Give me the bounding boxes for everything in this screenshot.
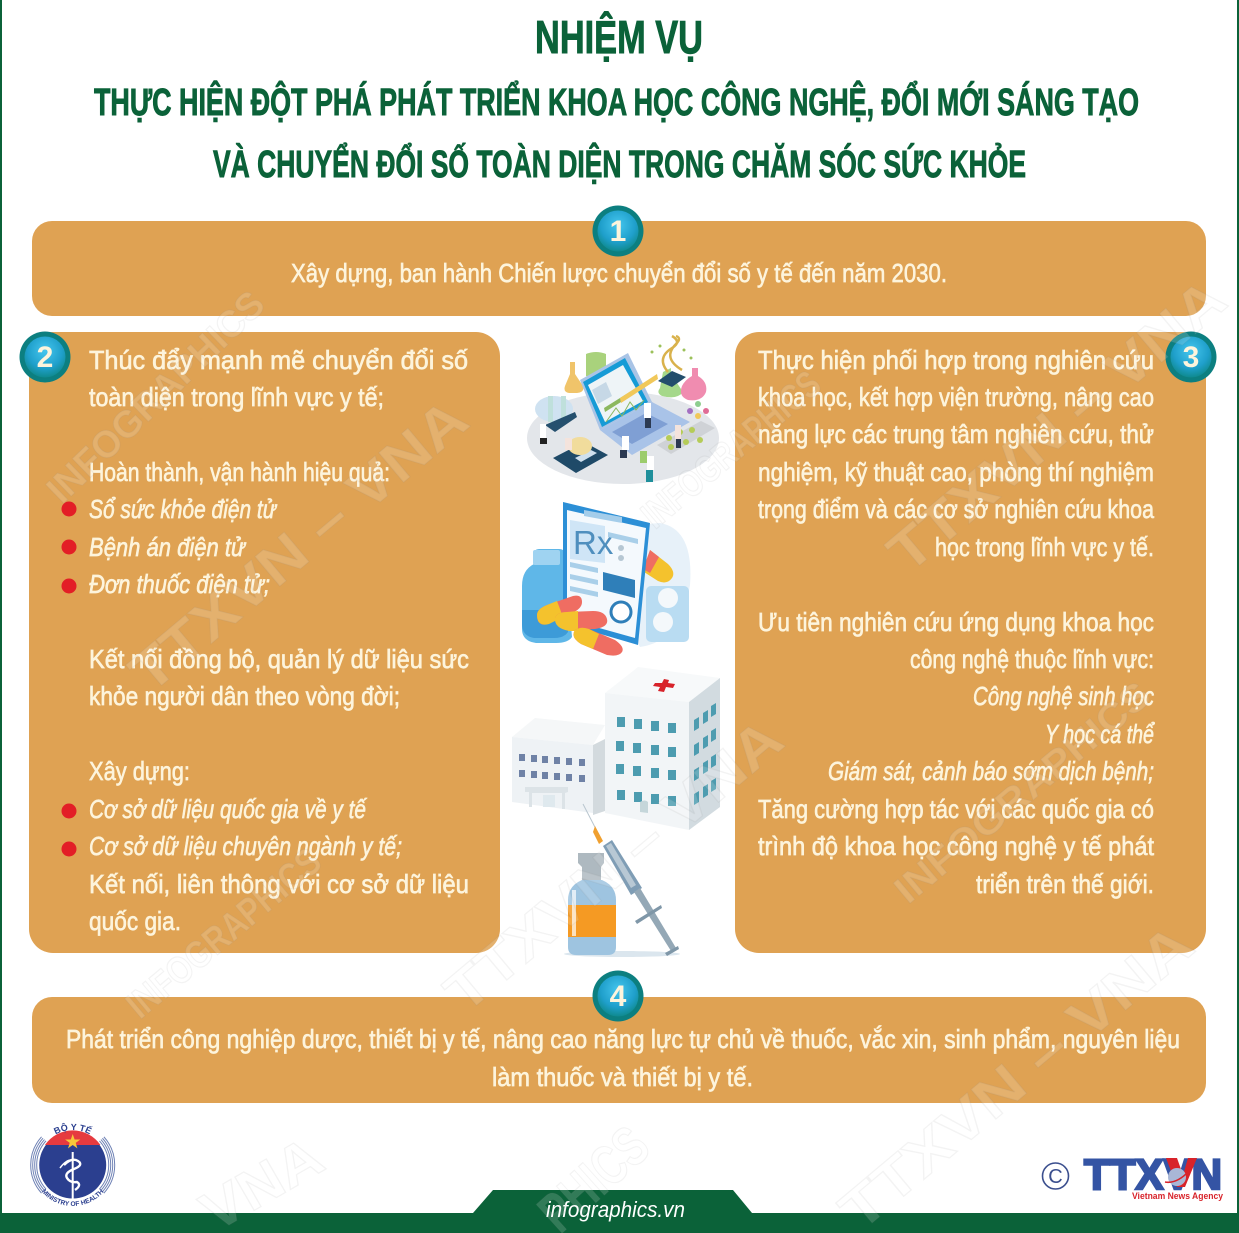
text: TTXVN – VNA [117,386,479,704]
text: TTXVN – VNA [432,706,794,1024]
panel: task 3: trình độ khoa học công nghệ y tế phát [758,831,1155,861]
badge 1: 1 [610,215,626,248]
panel: task 3: khoa học, kết hợp viện trường, nâng cao [758,382,1154,412]
text: INFOGRAPHICS [634,363,829,537]
logo: TTXVN: TTXVN [1084,1151,1222,1199]
badge 2 [20,332,70,382]
panel: task 3: học trong lĩnh vực y tế. [935,532,1154,562]
badge 3: 3 [1183,341,1199,374]
panel: task 2: Thúc đẩy mạnh mẽ chuyển đổi số [89,345,468,375]
panel: task 3: trọng điểm và các cơ sở nghiên cứu khoa [758,494,1154,524]
text: INFOGRAPHICS [887,674,1159,912]
panel: task 2: quốc gia. [89,906,181,936]
icon: prescription and pills: Rx [573,524,614,561]
badge 3 [1166,332,1216,382]
logo: Ministry of Health: BỘ Y TẾ [54,1122,93,1134]
panel: task 1 [32,221,1206,316]
panel: task 2: Đơn thuốc điện tử; [89,569,270,599]
panel: task 3: năng lực các trung tâm nghiên cứu, thử [758,419,1154,449]
panel: task 2: Cơ sở dữ liệu chuyên ngành y tế; [89,831,402,861]
panel: task 2: Cơ sở dữ liệu quốc gia về y tế [89,794,367,824]
panel: task 2: Sổ sức khỏe điện tử [89,494,277,524]
icon: laboratory and laptop [527,336,719,484]
footer band: infographics.vn [546,1197,685,1222]
panel: task 2: toàn diện trong lĩnh vực y tế; [89,382,384,412]
icon: hospital buildings [512,667,720,830]
logo: TTXVN: C [1048,1166,1063,1188]
panel: task 3: Thực hiện phối hợp trong nghiên cứu [758,345,1154,375]
panel: task 4 [32,997,1206,1103]
panel: task 1: Xây dựng, ban hành Chiến lược chuyển đổi số y tế đến năm 2030. [291,258,947,288]
badge 2: 2 [37,341,53,374]
panel: task 3: Y học cá thể [1045,719,1155,749]
panel: task 4: làm thuốc và thiết bị y tế. [492,1062,753,1092]
panel: task 3: công nghệ thuộc lĩnh vực: [910,644,1154,674]
panel: task 3: Giám sát, cảnh báo sớm dịch bệnh; [828,756,1154,786]
title: NHIỆM VỤ [535,11,703,63]
panel: task 3: triển trên thế giới. [976,869,1154,899]
panel: task 2: Bệnh án điện tử [89,532,246,562]
panel: task 2 [29,332,500,953]
panel: task 3: nghiệm, kỹ thuật cao, phòng thí nghiệm [758,457,1154,487]
panel: task 3: Công nghệ sinh học [973,681,1154,711]
panel: task 2: Kết nối, liên thông với cơ sở dữ liệu [89,869,469,899]
logo: TTXVN: Vietnam News Agency [1132,1191,1224,1202]
badge 4: 4 [610,980,627,1013]
badge 4 [592,970,644,1022]
panel: task 2: Kết nối đồng bộ, quản lý dữ liệu sức [89,644,469,674]
logo: Ministry of Health: MINISTRY OF HEALTH [42,1189,104,1206]
panel: task 2: Hoàn thành, vận hành hiệu quả: [89,457,390,487]
panel: task 3: Ưu tiên nghiên cứu ứng dụng khoa học [758,607,1154,637]
badge 1 [592,206,644,256]
panel: task 2: Xây dựng: [89,756,190,786]
panel: task 3: Tăng cường hợp tác với các quốc gia có [758,794,1154,824]
title [94,11,1139,186]
panel: task 3 [735,332,1206,953]
text: INFOGRAPHICS [119,840,330,1027]
text: INFOGRAPHICS [39,283,273,511]
logo: Ministry of Health [30,1122,116,1206]
text: TTXVN – VNA [875,266,1237,584]
icon: prescription and pills [522,502,690,656]
panel: task 2: khỏe người dân theo vòng đời; [89,681,400,711]
footer band [0,1190,1239,1233]
icon: vaccine vial and syringe [564,804,680,957]
